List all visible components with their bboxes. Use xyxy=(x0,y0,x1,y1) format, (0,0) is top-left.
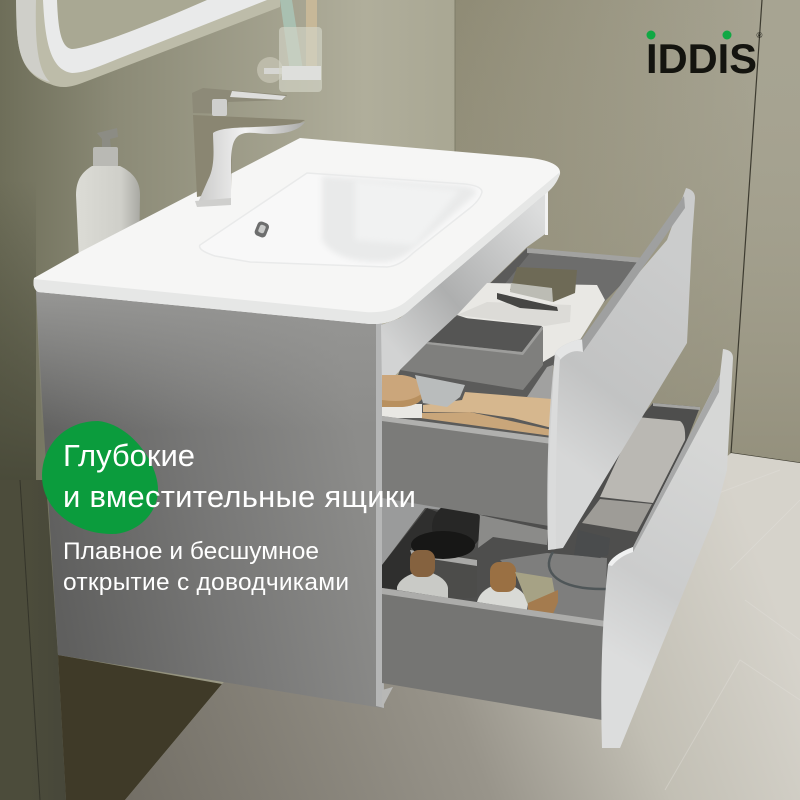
right bottle xyxy=(477,562,528,610)
lower drawer front xyxy=(601,349,733,748)
storage tray xyxy=(400,317,543,390)
folded towel xyxy=(457,283,605,362)
logo: IDDIS: IDDIS xyxy=(646,35,757,82)
heading xyxy=(63,438,416,514)
glass jar xyxy=(410,531,477,600)
lower drawer interior xyxy=(382,403,700,625)
heading: и вместительные ящики xyxy=(63,479,416,514)
heading: Глубокие xyxy=(63,438,195,473)
vanity side panel xyxy=(36,290,393,708)
subheading: открытие с доводчиками xyxy=(63,569,349,596)
green blob xyxy=(42,421,158,534)
upper drawer interior xyxy=(382,248,645,440)
perfume bottle xyxy=(510,267,577,302)
countertop with basin xyxy=(34,138,560,324)
dark accessory xyxy=(497,293,558,311)
subheading xyxy=(63,538,349,596)
wooden board xyxy=(423,392,552,428)
hair dryer xyxy=(432,502,610,589)
soap dispenser xyxy=(76,128,140,271)
logo: IDDIS: ® xyxy=(756,31,762,40)
wooden scrub brush xyxy=(515,572,558,614)
hair brush xyxy=(415,375,465,407)
upper drawer front xyxy=(547,188,695,550)
subheading: Плавное и бесшумное xyxy=(63,538,319,565)
lower drawer side xyxy=(382,588,606,720)
towels in lower drawer xyxy=(600,417,685,503)
faucet xyxy=(192,88,305,207)
mirror xyxy=(16,0,280,87)
vanity front frame xyxy=(381,190,548,565)
upper drawer side xyxy=(382,416,552,526)
toothbrush cup xyxy=(257,0,322,92)
left bottle xyxy=(397,550,448,598)
round wooden lid xyxy=(382,375,424,418)
